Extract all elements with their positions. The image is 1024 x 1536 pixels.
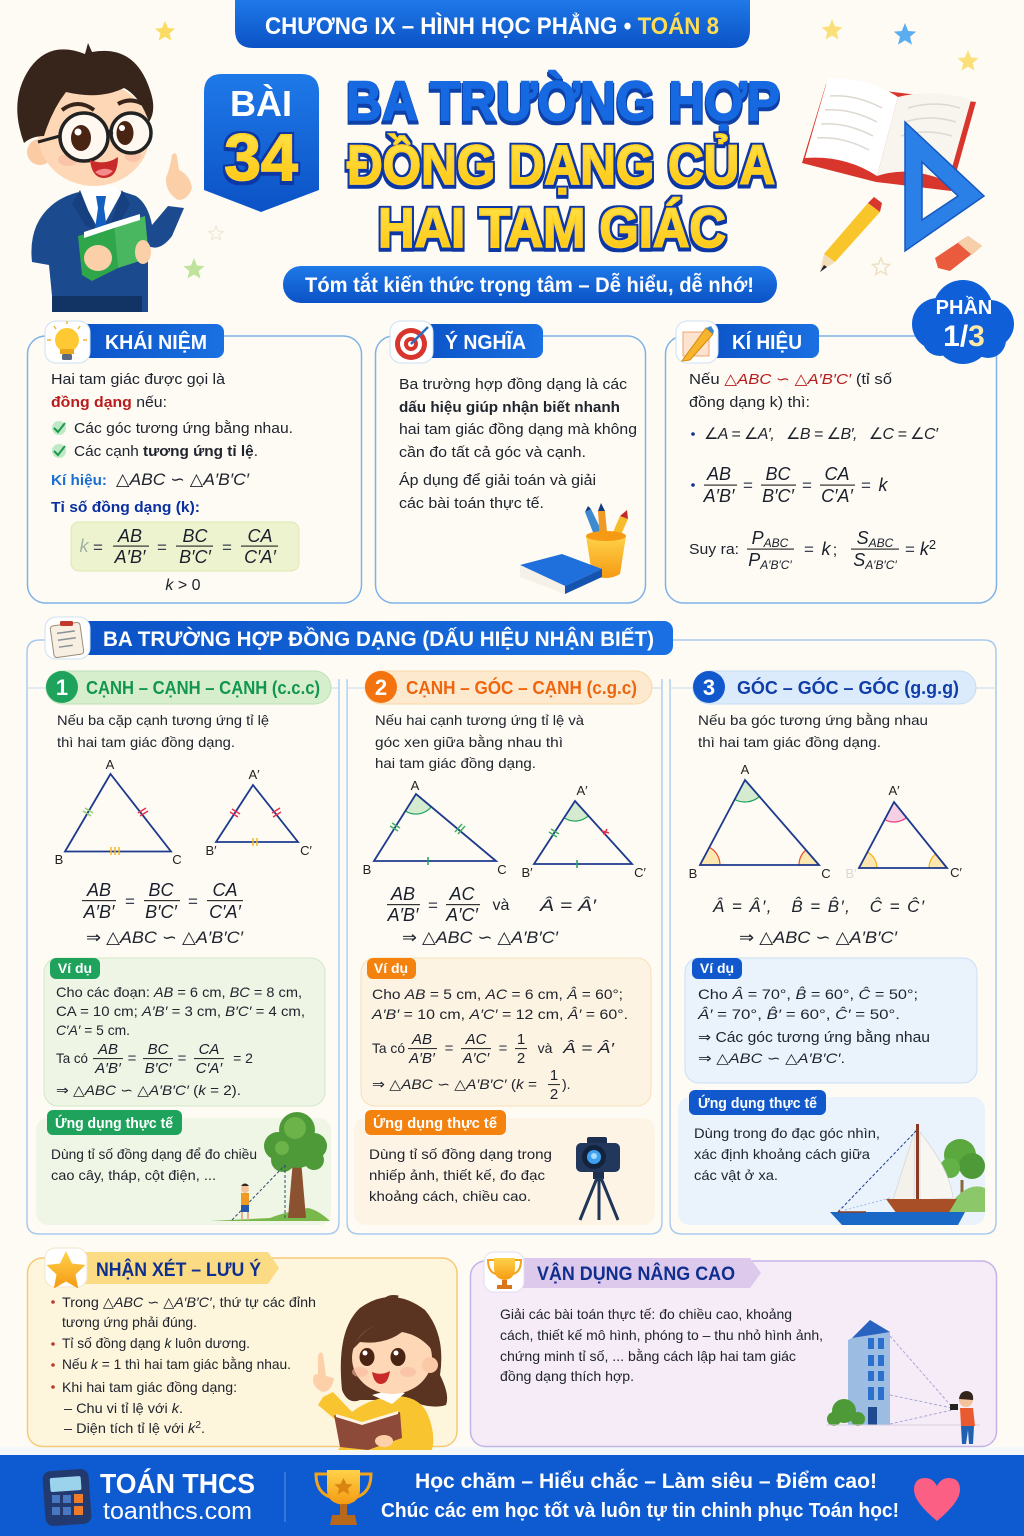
formula: c.g.c ratios: AC — [448, 884, 475, 904]
title — [346, 69, 780, 259]
text: advanced applications: đồng dạng thích hợp. — [500, 1368, 634, 1384]
list: notes: – Diện tích tỉ lệ với k — [64, 1420, 195, 1436]
heading: c.g.c: 2 — [375, 675, 387, 700]
column 2: c.g.c — [354, 671, 655, 1225]
diagram: triangle ABC with angles: C — [821, 866, 831, 881]
example: c.g.c: 2 — [517, 1050, 525, 1067]
diagram: triangle ABC with angle A: A — [411, 778, 420, 793]
diagram: triangle ABC: A — [106, 757, 115, 772]
list: notes: 2 — [195, 1420, 201, 1431]
example: c.c.c: A′B′ — [94, 1060, 122, 1077]
list: notes: Trong △ABC ∽ △A′B′C′, thứ tự các đỉnh — [62, 1294, 316, 1310]
footer band — [0, 1455, 1024, 1536]
text: c.c.c statement — [57, 712, 269, 750]
example: g.g.g: ⇒ △ABC ∽ △A′B′C′ . — [698, 1050, 845, 1066]
heading: g.g.g: GÓC – GÓC – GÓC (g.g.g) — [737, 677, 959, 698]
title: BA TRƯỜNG HỢP — [346, 69, 780, 132]
formula box: similarity ratio — [71, 522, 299, 571]
badge: part 1/3: 1/3 — [943, 320, 985, 353]
icon: eraser — [935, 236, 982, 271]
heading: three cases: BA TRƯỜNG HỢP ĐỒNG DẠNG (DẤU HIỆU NHẬN BIẾT) — [103, 627, 654, 651]
example: c.g.c: A′B′ = 10 cm, A′C′ = 12 cm, Â′ = 60°. — [371, 1006, 628, 1022]
icon: calculator — [42, 1468, 92, 1527]
formula: perimeter and area ratios: Suy ra: — [689, 541, 739, 558]
formula: side ratios: = — [861, 476, 871, 495]
text: notation intro: đồng dạng k) thì: — [689, 394, 810, 411]
list: notes: Tỉ số đồng dạng k luôn dương. — [62, 1335, 250, 1351]
panel: khái niệm — [28, 321, 362, 603]
example: c.c.c: Ta có — [56, 1050, 88, 1066]
subtitle pill: Tóm tắt kiến thức trọng tâm – Dễ hiểu, dễ nhớ! — [305, 273, 754, 297]
example: c.c.c — [44, 958, 325, 1106]
title: HAI TAM GIÁC — [378, 196, 726, 259]
formula: perimeter and area ratios: 2 — [929, 537, 936, 552]
brand — [100, 1468, 255, 1525]
text: g.g.g statement: Nếu ba góc tương ứng bằng nhau — [698, 712, 928, 728]
heading: nhận xét: NHẬN XÉT – LƯU Ý — [96, 1259, 261, 1281]
formula: c.c.c ratios: A′B′ — [83, 902, 115, 922]
formula box: similarity ratio: = — [93, 538, 103, 557]
list: notes: tương ứng phải đúng. — [62, 1314, 197, 1330]
text: meaning: hai tam giác đồng dạng mà không — [399, 421, 637, 438]
column 3: g.g.g — [678, 671, 985, 1225]
text: g.g.g statement — [698, 712, 928, 750]
panel: three similarity cases — [27, 617, 996, 1245]
example: c.g.c: 2 — [550, 1086, 558, 1103]
example: c.g.c: 1 — [550, 1067, 558, 1084]
text: definition: △ABC ∽ △A′B′C′ — [116, 470, 250, 489]
diagram: triangle A'B'C' with angles — [845, 783, 962, 881]
icon: open book — [802, 78, 976, 191]
text: c.g.c statement: Nếu hai cạnh tương ứng tỉ lệ và — [375, 712, 584, 728]
application: g.g.g: Ứng dụng thực tế — [698, 1094, 818, 1112]
formula box: similarity ratio: B′C′ — [179, 547, 211, 567]
list: notes: – Chu vi tỉ lệ với k. — [64, 1400, 183, 1416]
formula: side ratios: C′A′ — [821, 486, 853, 506]
example: g.g.g: Cho Â = 70°, B̂ = 60°, Ĉ = 50°; — [698, 986, 918, 1002]
example: c.g.c: AB — [411, 1031, 432, 1048]
formula: g.g.g equal angles: ⇒ △ABC ∽ △A′B′C′ — [739, 928, 898, 947]
text: c.c.c statement: thì hai tam giác đồng dạng. — [57, 734, 235, 750]
text: definition: Hai tam giác được gọi là — [51, 371, 226, 388]
badge: lesson number: 34 — [224, 120, 298, 194]
heading: c.c.c: CẠNH – CẠNH – CẠNH (c.c.c) — [86, 678, 320, 698]
illustration: sailboat — [830, 1124, 985, 1225]
formula: c.c.c ratios: B′C′ — [145, 902, 177, 922]
heading: vận dụng nâng cao: VẬN DỤNG NÂNG CAO — [537, 1263, 735, 1285]
diagram: triangle A'B'C': C′ — [300, 843, 312, 858]
list: notes: Nếu k = 1 thì hai tam giác bằng nhau. — [62, 1356, 291, 1372]
icon: set square ruler — [905, 122, 984, 251]
example: c.g.c: ⇒ △ABC ∽ △A′B′C′ (k = — [372, 1076, 537, 1092]
heading: kí hiệu — [676, 321, 819, 363]
formula: c.g.c ratios — [387, 884, 597, 947]
formula box: similarity ratio: CA — [247, 526, 273, 546]
list: notes — [51, 1294, 316, 1436]
example: c.c.c: = — [178, 1050, 187, 1067]
application: c.c.c: Dùng tỉ số đồng dạng để đo chiều — [51, 1146, 257, 1162]
application: c.g.c — [354, 1110, 655, 1225]
diagram: triangle ABC with angles: A — [741, 762, 750, 777]
diagram: triangle ABC with angle A: C — [497, 862, 507, 877]
example: c.g.c: Â = Â′ — [562, 1040, 616, 1057]
formula: perimeter and area ratios: P — [752, 528, 764, 548]
formula: c.c.c ratios: CA — [212, 880, 238, 900]
heading: ý nghĩa: Ý NGHĨA — [445, 330, 526, 354]
diagram: triangle A'B'C': A′ — [248, 767, 260, 782]
formula: c.g.c ratios: = — [428, 896, 438, 915]
illustration: boy with book — [17, 43, 192, 312]
formula: side ratios: B′C′ — [762, 486, 794, 506]
formula: side ratios: k — [878, 475, 888, 495]
formula: c.c.c ratios: BC — [148, 880, 174, 900]
diagram: triangle A'B'C' with angle A' — [521, 783, 646, 880]
text: definition: Các cạnh tương ứng tỉ lệ. — [74, 443, 258, 460]
formula: c.g.c ratios: ⇒ △ABC ∽ △A′B′C′ — [402, 928, 559, 947]
formula: side ratios: = — [802, 476, 812, 495]
example: c.c.c: Cho các đoạn: AB = 6 cm, BC = 8 cm, — [56, 984, 302, 1000]
diagram: triangle A'B'C' — [205, 767, 312, 858]
application: c.c.c — [36, 1110, 331, 1225]
example: c.g.c: và — [538, 1040, 553, 1056]
decorative stars — [155, 19, 978, 278]
diagram: triangle ABC with angles — [689, 762, 831, 881]
diagram: triangle ABC: C — [172, 852, 182, 867]
text: meaning: Áp dụng để giải toán và giải — [399, 472, 596, 489]
example: g.g.g: ⇒ Các góc tương ứng bằng nhau — [698, 1029, 930, 1046]
formula: c.c.c ratios: C′A′ — [209, 902, 241, 922]
footer message: Học chăm – Hiểu chắc – Làm siêu – Điểm cao! — [415, 1469, 877, 1493]
badge: part 1/3: PHẦN — [936, 296, 992, 319]
application: c.g.c: khoảng cách, chiều cao. — [369, 1188, 531, 1204]
formula: g.g.g equal angles: Â = Â′, B̂ = B̂′, Ĉ = Ĉ′ — [712, 896, 925, 916]
badge: lesson number: BÀI — [230, 83, 292, 124]
formula: equal angles: ∠A = ∠A′, ∠B = ∠B′, ∠C = ∠C′ — [704, 426, 939, 443]
formula box: similarity ratio: C′A′ — [244, 547, 276, 567]
application: g.g.g: Dùng trong đo đạc góc nhìn, — [694, 1125, 880, 1141]
formula: c.g.c ratios: AB — [390, 884, 415, 904]
diagram: triangle ABC — [55, 757, 182, 867]
example: g.g.g: Ví dụ — [700, 960, 734, 976]
text: definition — [51, 371, 293, 516]
formula: side ratios: = — [743, 476, 753, 495]
formula: c.g.c ratios: và — [493, 897, 510, 914]
brand: toanthcs.com — [103, 1498, 252, 1525]
example: c.g.c: Cho AB = 5 cm, AC = 6 cm, Â = 60°; — [372, 986, 623, 1002]
top banner: chapter: CHƯƠNG IX – HÌNH HỌC PHẲNG • TOÁN 8 — [265, 12, 719, 40]
formula: g.g.g equal angles — [712, 896, 925, 947]
example: c.g.c: AC — [465, 1031, 487, 1048]
formula: perimeter and area ratios: A′B′C′ — [759, 558, 792, 572]
diagram: triangle ABC with angles: B — [689, 866, 697, 881]
title: ĐỒNG DẠNG CỦA — [347, 133, 775, 196]
formula: side ratios: BC — [765, 464, 791, 484]
text: meaning: cần đo tất cả góc và cạnh. — [399, 444, 586, 461]
icon: trophy — [316, 1470, 371, 1525]
formula box: similarity ratio: = — [222, 538, 232, 557]
badge: lesson number — [204, 74, 319, 212]
illustration: girl reading — [313, 1297, 447, 1450]
example: c.g.c: Ví dụ — [374, 960, 408, 976]
illustration: tree and boy measuring — [210, 1112, 330, 1221]
diagram: triangle ABC with angle A: B — [363, 862, 371, 877]
text: meaning: dấu hiệu giúp nhận biết nhanh — [399, 399, 620, 416]
example: c.c.c: C′A′ — [196, 1060, 223, 1077]
footer message: Chúc các em học tốt và luôn tự tin chinh phục Toán học! — [381, 1500, 899, 1522]
application: c.g.c: Ứng dụng thực tế — [373, 1114, 498, 1132]
text: g.g.g statement: thì hai tam giác đồng dạng. — [698, 734, 881, 750]
formula: perimeter and area ratios: S — [857, 528, 869, 548]
formula box: similarity ratio: = — [157, 538, 167, 557]
text: meaning — [399, 376, 637, 512]
example: c.c.c: Ví dụ — [58, 960, 92, 976]
formula: side ratios: AB — [706, 464, 731, 484]
text: advanced applications: cách, thiết kế mô hình, phóng to – thu nhỏ hình ảnh, — [500, 1327, 823, 1343]
footer message — [381, 1469, 899, 1522]
formula: c.c.c ratios: ⇒ △ABC ∽ △A′B′C′ — [86, 928, 244, 947]
illustration: camera on tripod — [576, 1137, 620, 1220]
example: c.g.c: A′B′ — [408, 1050, 436, 1067]
formula: c.c.c ratios: AB — [86, 880, 111, 900]
formula: perimeter and area ratios: = — [905, 540, 915, 559]
example: c.c.c: CA — [199, 1041, 219, 1058]
formula: perimeter and area ratios: ABC — [763, 536, 789, 550]
example: c.g.c: = — [499, 1040, 508, 1057]
subtitle pill — [283, 266, 777, 303]
formula: side ratios: A′B′ — [703, 486, 735, 506]
diagram: triangle A'B'C' with angles: B′ — [845, 866, 857, 881]
diagram: triangle A'B'C': B′ — [205, 843, 217, 858]
formula: perimeter and area ratios: S — [853, 550, 865, 570]
example: g.g.g — [685, 958, 977, 1083]
formula: c.c.c ratios: = — [188, 892, 198, 911]
application: g.g.g — [678, 1090, 985, 1225]
example: c.g.c: A′C′ — [462, 1050, 490, 1067]
list: notes: Khi hai tam giác đồng dạng: — [62, 1379, 237, 1395]
text: meaning: Ba trường hợp đồng dạng là các — [399, 376, 628, 393]
application: c.g.c: nhiếp ảnh, thiết kế, đo đạc — [369, 1167, 545, 1183]
diagram: triangle A'B'C' with angle A': C′ — [634, 865, 646, 880]
text: notation intro: Nếu △ABC ∽ △A′B′C′ (tỉ số — [689, 371, 893, 388]
diagram: triangle ABC: B — [55, 852, 63, 867]
formula: c.c.c ratios — [82, 880, 244, 947]
icon: pencil — [820, 197, 882, 272]
formula: c.g.c ratios: A′B′ — [387, 905, 419, 925]
icon: heart — [914, 1478, 960, 1521]
diagram: triangle A'B'C' with angle A': A′ — [576, 783, 588, 798]
diagram: triangle A'B'C' with angles: C′ — [950, 865, 962, 880]
example: g.g.g: Â′ = 70°, B̂′ = 60°, Ĉ′ = 50°. — [697, 1006, 900, 1022]
formula: perimeter and area ratios: ABC — [868, 536, 894, 550]
icon: blue book — [520, 554, 602, 594]
heading: vận dụng nâng cao — [484, 1252, 761, 1292]
text: notation intro — [689, 371, 893, 411]
application: g.g.g: xác định khoảng cách giữa — [694, 1146, 870, 1162]
formula: perimeter and area ratios: ; — [833, 542, 837, 559]
example: c.g.c: Ta có — [372, 1040, 405, 1056]
text: meaning: các bài toán thực tế. — [399, 495, 544, 512]
heading: ý nghĩa — [390, 321, 543, 363]
text: c.g.c statement: hai tam giác đồng dạng. — [375, 755, 536, 771]
text: c.g.c statement — [375, 712, 584, 771]
formula: perimeter and area ratios: k — [822, 539, 832, 559]
formula: c.g.c ratios: Â = Â′ — [539, 896, 597, 915]
heading: three cases — [45, 617, 673, 659]
formula: perimeter and area ratios: A′B′C′ — [864, 558, 897, 572]
illustration: building and observer — [826, 1320, 980, 1444]
formula: side ratios — [691, 464, 888, 506]
heading: kí hiệu: KÍ HIỆU — [732, 330, 802, 354]
text: c.g.c statement: góc xen giữa bằng nhau thì — [375, 734, 563, 750]
panel: vận dụng nâng cao — [470, 1252, 996, 1446]
formula box: similarity ratio: AB — [117, 526, 142, 546]
text: definition: Tỉ số đồng dạng (k): — [51, 499, 200, 516]
example: c.g.c — [361, 958, 651, 1106]
column 1: c.c.c — [36, 671, 331, 1225]
heading: c.c.c — [46, 671, 331, 704]
example: c.g.c: 1 — [517, 1031, 525, 1048]
text: advanced applications: chứng minh tỉ số, ... bằng cách lập hai tam giác — [500, 1348, 796, 1364]
formula box: similarity ratio: BC — [182, 526, 208, 546]
text: advanced applications — [500, 1306, 823, 1384]
application: c.g.c: Dùng tỉ số đồng dạng trong — [369, 1146, 552, 1162]
diagram: triangle A'B'C' with angle A': B′ — [521, 865, 533, 880]
example: c.c.c: AB — [97, 1041, 118, 1058]
formula: perimeter and area ratios — [689, 528, 936, 572]
formula: perimeter and area ratios: k — [920, 539, 929, 559]
application: c.c.c: cao cây, tháp, cột điện, ... — [51, 1167, 216, 1183]
text: advanced applications: Giải các bài toán thực tế: đo chiều cao, khoảng — [500, 1306, 792, 1322]
panel: nhận xét - lưu ý — [28, 1248, 457, 1450]
formula: c.c.c ratios: = — [125, 892, 135, 911]
example: c.c.c: C′A′ = 5 cm. — [56, 1022, 130, 1038]
diagram: triangle A'B'C' with angles: A′ — [888, 783, 900, 798]
formula: perimeter and area ratios: = — [804, 540, 814, 559]
heading: c.g.c: CẠNH – GÓC – CẠNH (c.g.c) — [406, 677, 637, 698]
diagram: triangle ABC with angle A — [363, 778, 507, 877]
text: k positive: k > 0 — [165, 577, 201, 594]
example: c.g.c: ). — [562, 1076, 571, 1092]
panel: kí hiệu — [666, 321, 996, 603]
example: c.c.c: ⇒ △ABC ∽ △A′B′C′ (k = 2). — [56, 1082, 241, 1098]
top banner: chapter — [235, 0, 750, 48]
heading: khái niệm — [45, 321, 224, 363]
list: notes: . — [201, 1420, 205, 1436]
heading: g.g.g — [693, 671, 976, 704]
panel: ý nghĩa — [376, 321, 646, 603]
badge: part 1/3 — [912, 280, 1014, 364]
example: c.c.c: = — [128, 1050, 137, 1067]
example: c.c.c: = 2 — [233, 1050, 253, 1066]
heading: khái niệm: KHÁI NIỆM — [105, 330, 207, 354]
example: c.g.c: = — [445, 1040, 454, 1057]
text: definition: đồng dạng nếu: — [51, 394, 167, 411]
formula box: similarity ratio: A′B′ — [114, 547, 146, 567]
formula: perimeter and area ratios: P — [748, 550, 760, 570]
heading: nhận xét — [45, 1248, 279, 1288]
formula: c.g.c ratios: A′C′ — [445, 905, 478, 925]
formula box: similarity ratio: k — [80, 536, 90, 556]
example: c.c.c: B′C′ — [145, 1060, 172, 1077]
text: definition: Các góc tương ứng bằng nhau. — [74, 420, 293, 437]
example: c.c.c: BC — [148, 1041, 169, 1058]
heading: c.g.c — [365, 671, 652, 704]
formula: side ratios: CA — [824, 464, 850, 484]
heading: c.c.c: 1 — [56, 675, 68, 700]
example: c.c.c: CA = 10 cm; A′B′ = 3 cm, B′C′ = 4 cm, — [56, 1003, 305, 1019]
text: c.c.c statement: Nếu ba cặp cạnh tương ứng tỉ lệ — [57, 712, 269, 728]
icon: pencil cup — [585, 503, 628, 578]
application: g.g.g: các vật ở xa. — [694, 1167, 778, 1183]
brand: TOÁN THCS — [100, 1468, 255, 1499]
application: c.c.c: Ứng dụng thực tế — [55, 1114, 174, 1132]
heading: g.g.g: 3 — [703, 675, 715, 700]
text: definition: Kí hiệu: — [51, 472, 107, 489]
